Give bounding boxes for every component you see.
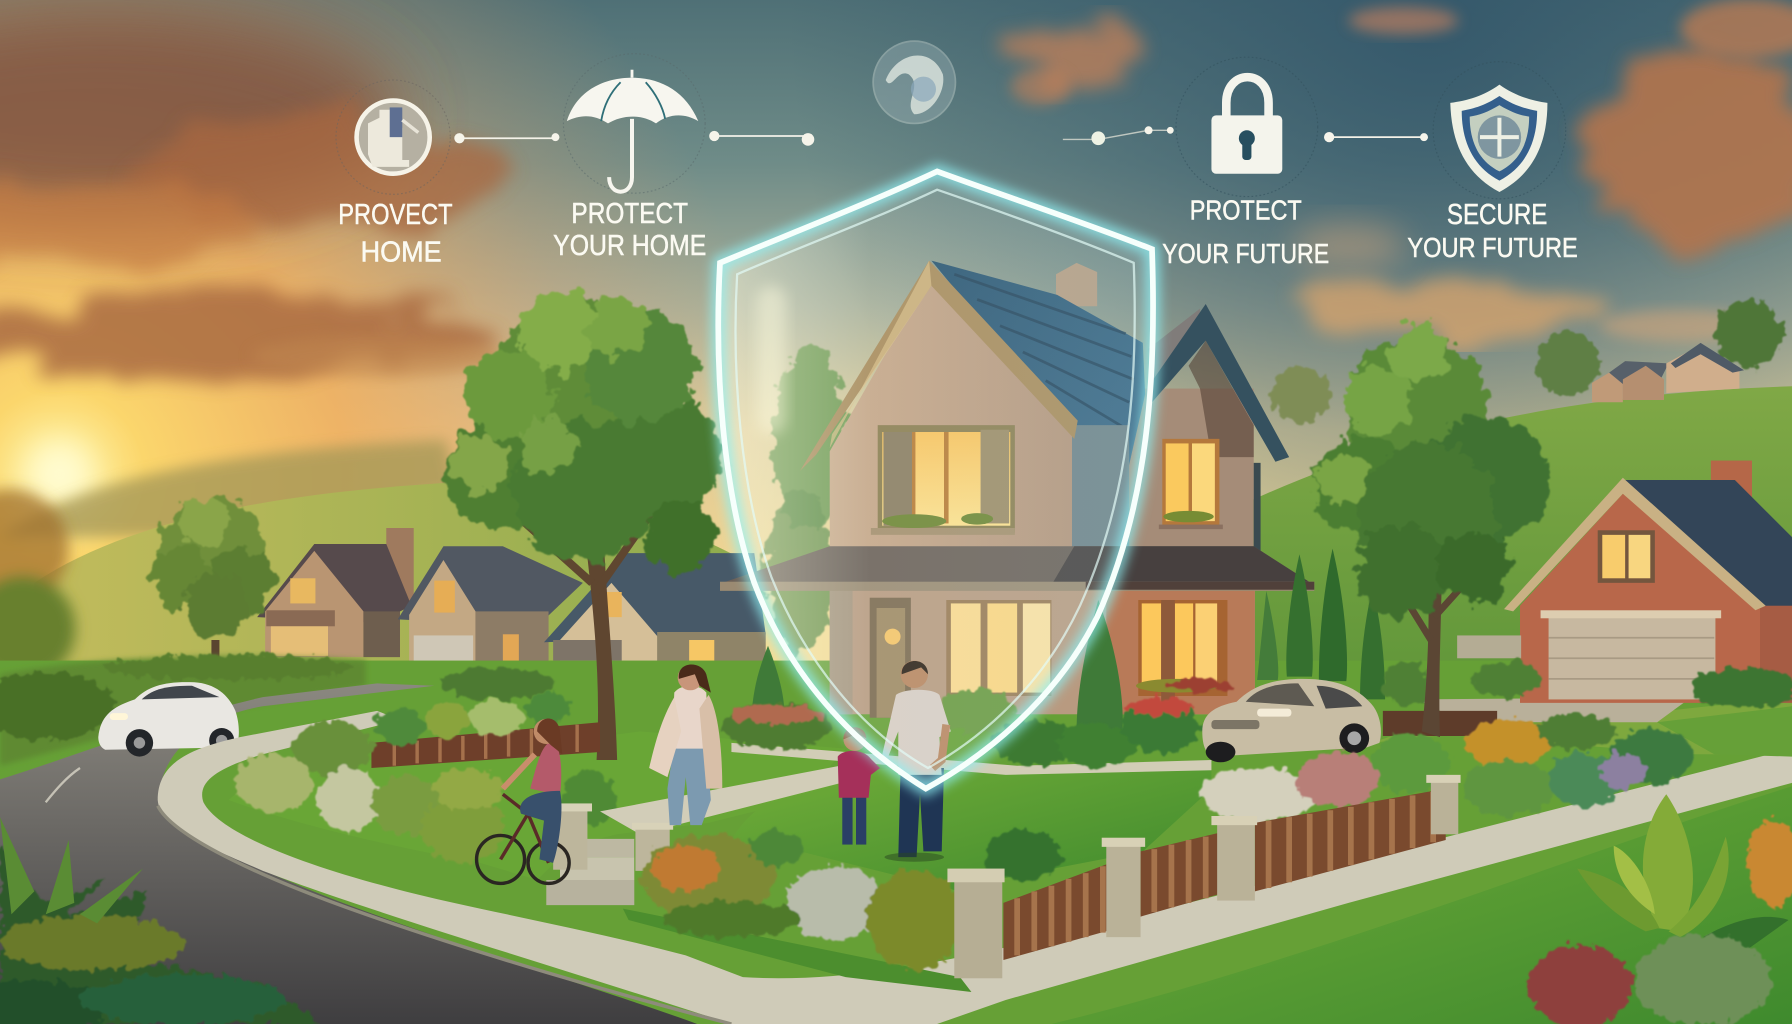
timeline icons and labels: [336, 41, 1578, 269]
glowing protective shield: [718, 171, 1153, 789]
upper main window: [871, 425, 1015, 535]
ground floor: [830, 586, 1255, 714]
foreground plants bottom right: [1527, 794, 1792, 1024]
neighbouring house far left: [257, 528, 414, 657]
step 4: padlock protect your future: [1162, 57, 1329, 269]
main house: [720, 261, 1314, 718]
step 5: shield secure your future: YOUR FUTURE: [1407, 232, 1578, 263]
step 1: protect home: PROVECT: [338, 199, 453, 231]
step 5: shield secure your future: SECURE: [1447, 199, 1547, 231]
distant houses on the hill: [1592, 343, 1744, 402]
gutter: [1254, 463, 1261, 571]
connector 1: [454, 133, 559, 143]
right flower beds: [1200, 713, 1693, 822]
front lawns: [229, 697, 1792, 1024]
gable trim: [800, 261, 1078, 471]
step 2: protect your home: PROTECT: [571, 198, 688, 230]
woman walking: [649, 665, 722, 825]
step 3: faint orb: [873, 41, 955, 123]
distant hills: [0, 299, 1792, 731]
father: [882, 661, 951, 862]
silver car: [1202, 679, 1381, 762]
upper right window: [1159, 439, 1223, 529]
left flower bed: [235, 693, 616, 863]
sidewalk: [158, 711, 1792, 1024]
white car: [98, 682, 239, 757]
connector 2: [709, 131, 814, 146]
cyclist: [477, 719, 569, 883]
step 2: protect your home: YOUR HOME: [553, 230, 706, 262]
step 4: padlock protect your future: YOUR FUTURE: [1162, 238, 1329, 269]
small tree left: [151, 495, 274, 691]
large tree left of house: [446, 290, 722, 760]
step 5: shield secure your future: [1407, 62, 1578, 263]
door: [870, 598, 911, 718]
large tree right: [1315, 325, 1550, 737]
right wing roof and walls: [1126, 304, 1289, 549]
neighbouring house behind tree: [544, 553, 766, 706]
connector 3: [1063, 126, 1174, 145]
main gable wall: [830, 278, 1072, 551]
step 1: protect home: [336, 80, 453, 269]
right hedges and fence: [1383, 661, 1792, 736]
base ground: [0, 656, 1792, 1024]
road: [0, 683, 697, 1024]
cypress trees: [752, 549, 1385, 731]
step 4: padlock protect your future: PROTECT: [1190, 194, 1302, 225]
child: [838, 727, 880, 845]
left lawns and shrubs: [0, 655, 554, 741]
left edge tree glow: [0, 489, 75, 681]
step 2: protect your home: [553, 54, 706, 262]
neighbouring house with garage: [398, 546, 583, 683]
chimney: [1056, 263, 1097, 306]
shrubs along house: [722, 679, 1232, 767]
tall tree behind house, seen through shield: [766, 346, 846, 651]
clouds: [0, 0, 1792, 381]
driveway steps: [546, 766, 846, 905]
front flower bed: [642, 830, 1062, 970]
connector 4: [1324, 132, 1428, 142]
back picket fence left: [371, 722, 600, 768]
ground floor right window: [1136, 600, 1227, 714]
front picket fence: [947, 775, 1461, 978]
step 1: protect home: HOME: [361, 237, 442, 269]
foreground plants bottom left: [0, 817, 320, 1024]
ground floor main window: [946, 600, 1051, 696]
neighbouring brick house right: [1457, 461, 1792, 703]
blue main roof: [931, 261, 1145, 480]
porch roof: [720, 546, 1314, 591]
